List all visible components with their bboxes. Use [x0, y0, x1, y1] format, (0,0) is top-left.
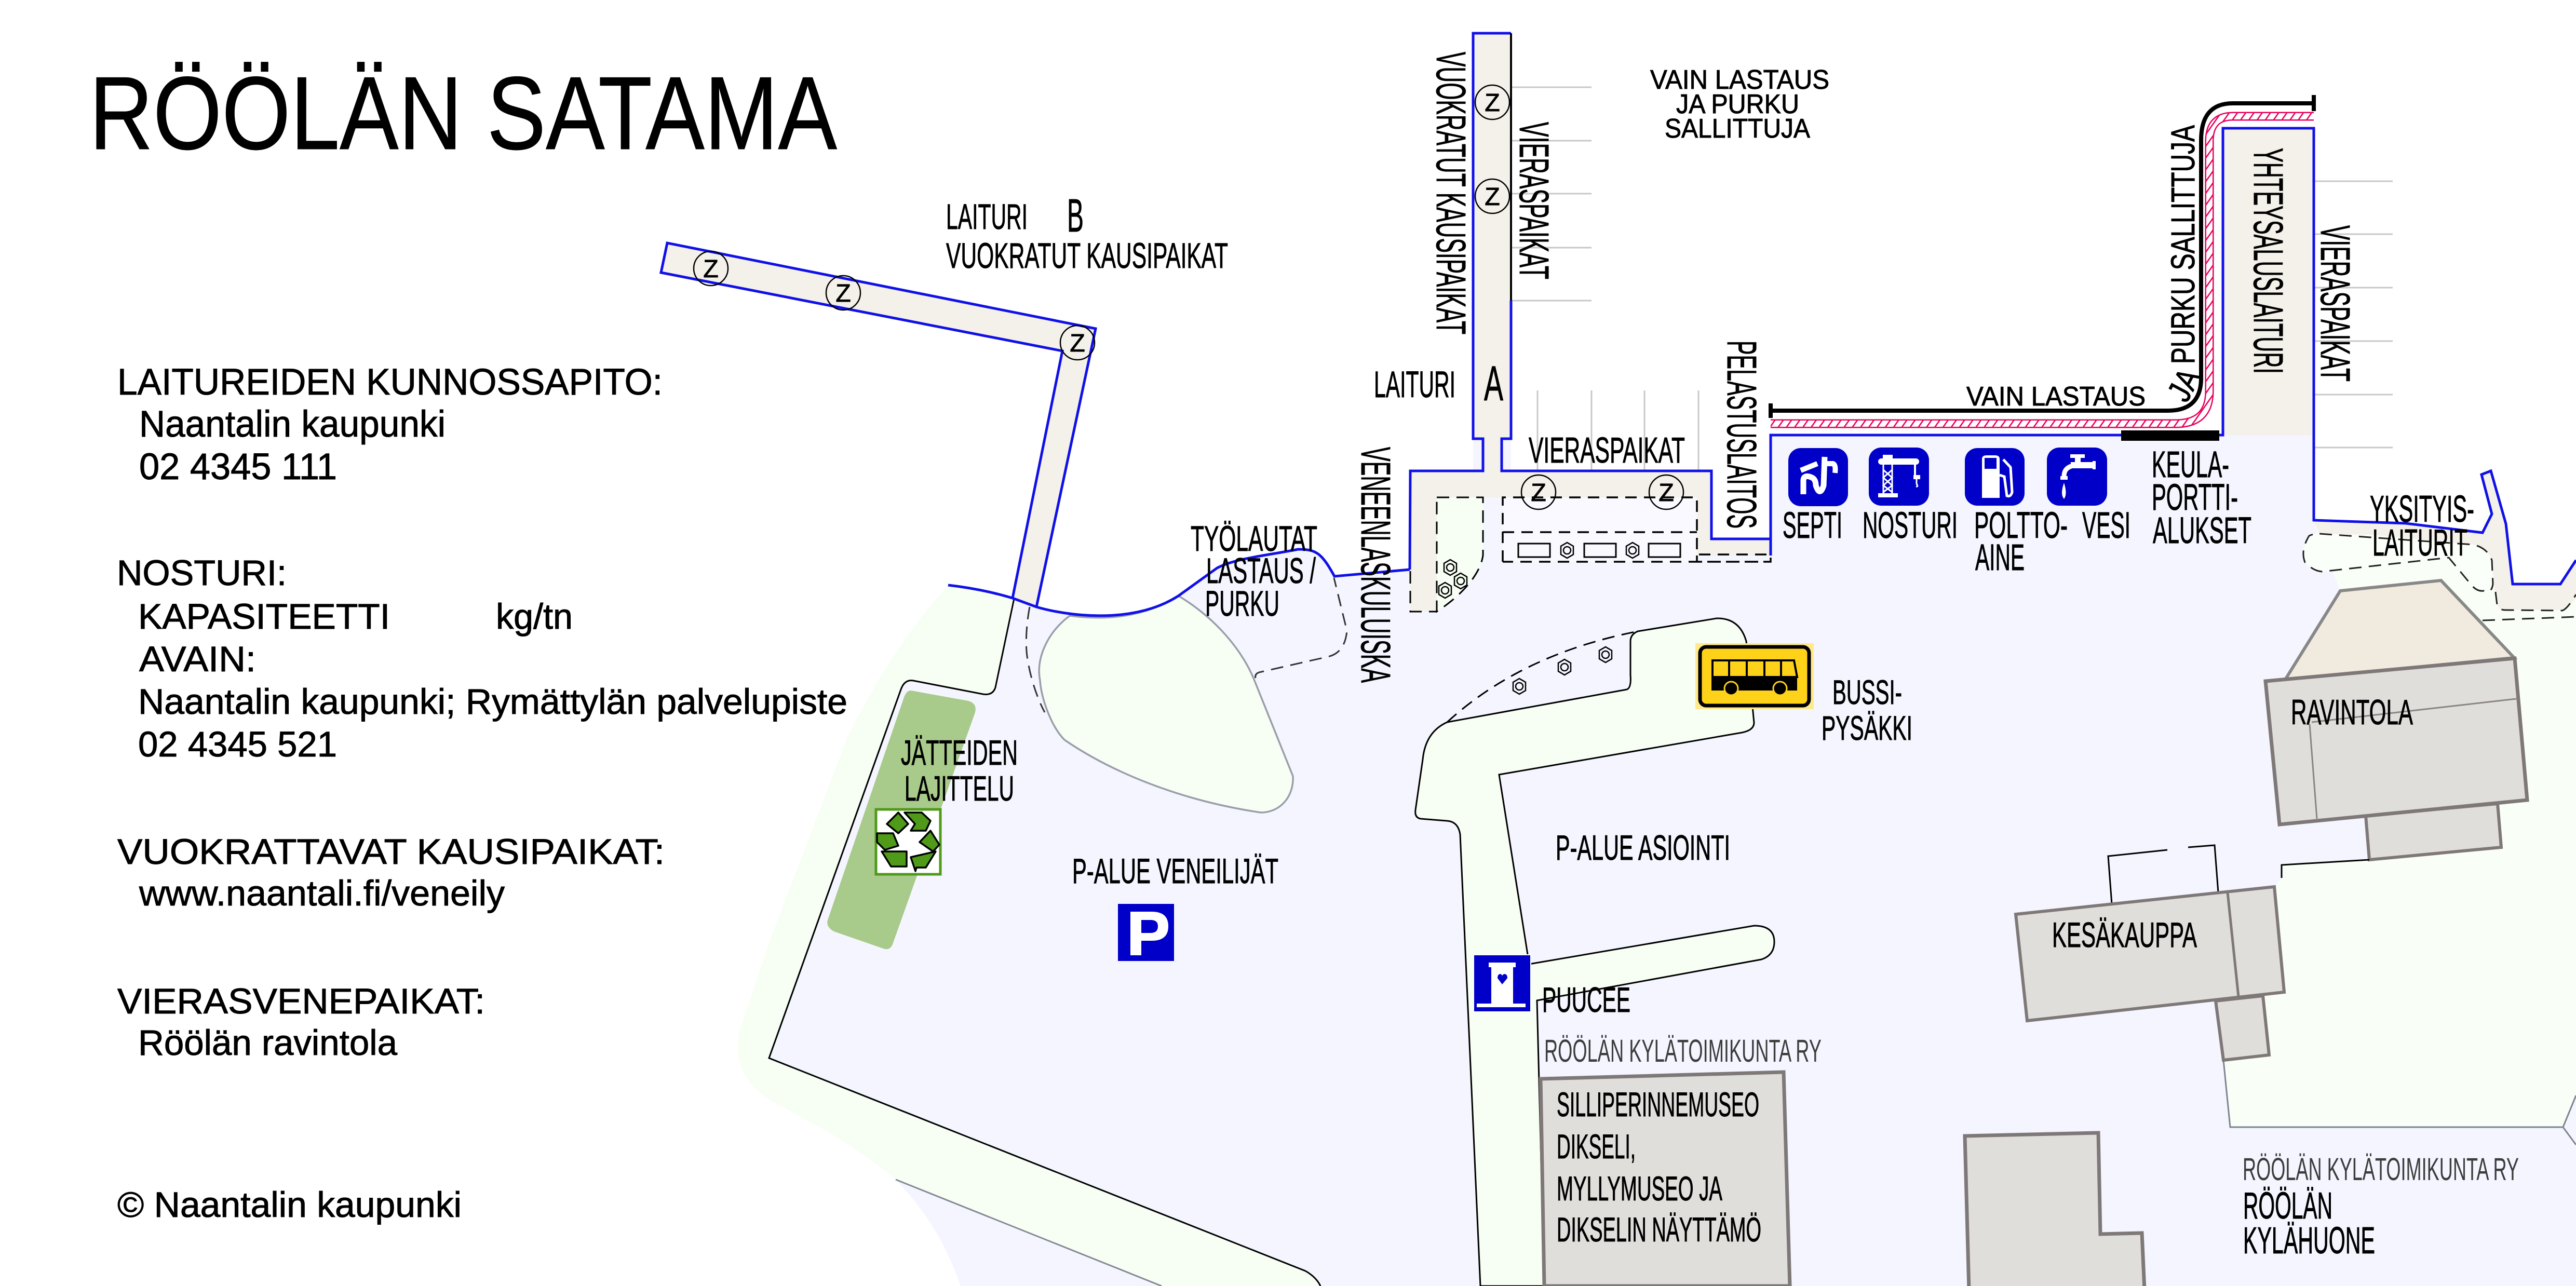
label: service icons [1783, 505, 2130, 578]
icon: bus stop sign [1695, 643, 1814, 709]
label: private piers [2370, 489, 2474, 564]
label: bow door ships: ALUKSET [2153, 510, 2251, 551]
label: unloading allowed vertical [2160, 125, 2208, 408]
label: private piers: YKSITYIS- [2370, 489, 2474, 530]
green area right [2223, 471, 2576, 1127]
label: pier B: B [1067, 190, 1084, 242]
label: unloading allowed vertical: PURKU SALLITTUJA [2164, 125, 2202, 364]
green island [1039, 596, 1293, 813]
label: bow door ships: KEULA- [2152, 444, 2229, 485]
info: crane: kg/tn [496, 597, 573, 637]
building: summer shop [2016, 887, 2284, 1021]
label: work platforms: PURKU [1205, 584, 1279, 624]
info: seasonal berths [117, 832, 665, 913]
pier B [661, 243, 1096, 607]
parking sign [1118, 904, 1174, 961]
mooring marker circles: Z [703, 255, 719, 283]
copyright: © Naantalin kaupunki [117, 1185, 462, 1225]
info: seasonal berths: VUOKRATTAVAT KAUSIPAIKAT: [117, 832, 665, 872]
shoreline left [948, 549, 1410, 616]
buildings: terrace [2285, 580, 2514, 680]
shore strip outline [769, 599, 1320, 1286]
label: loading and unloading: JA PURKU [1676, 89, 1799, 119]
label: bus stop [1822, 673, 1912, 747]
label: village hall [2243, 1152, 2519, 1262]
icon: fuel [1965, 448, 2025, 506]
label: museum: DIKSELI, [1557, 1127, 1636, 1166]
pink hatched no-mooring strip [1771, 116, 2314, 424]
icon: crane [1869, 448, 1929, 506]
label: unloading allowed vertical: JA [2160, 362, 2208, 408]
blue quay lines [1410, 33, 2576, 584]
building: restaurant annex [2366, 804, 2501, 860]
black loading line [1771, 95, 2314, 418]
info: crane: AVAIN: [139, 639, 256, 679]
label: museum [1557, 1085, 1761, 1249]
label: museum: SILLIPERINNEMUSEO [1557, 1085, 1759, 1123]
info: seasonal berths: www.naantali.fi/veneily [139, 873, 505, 913]
label: boat ramp: VENEENLASKULUISKA [1353, 447, 1399, 683]
label: village hall: RÖÖLÄN [2243, 1185, 2332, 1227]
label: guest berths horizontal: VIERASPAIKAT [1529, 430, 1685, 470]
label: work platforms: TYÖLAUTAT [1191, 519, 1317, 559]
private piers [2313, 471, 2576, 610]
label: service icons: AINE [1975, 537, 2025, 578]
info: pier maintenance: 02 4345 111 [139, 446, 337, 488]
label: work platforms [1191, 519, 1317, 624]
building: summer shop annex [2216, 996, 2269, 1060]
label: rented seasonal berths vertical: VUOKRATUT KAUSIPAIKAT [1428, 52, 1474, 334]
right plot boundary [2223, 1060, 2576, 1145]
green road and bus stop peninsula [1415, 618, 1774, 1286]
boat ramp [1410, 497, 1483, 612]
label: loading and unloading: VAIN LASTAUS [1650, 65, 1829, 95]
label: private piers: LAITURIT [2372, 522, 2467, 564]
label: service icons: VESI [2082, 505, 2130, 546]
info: crane: KAPASITEETTI [138, 597, 390, 637]
label: pier B: LAITURI [946, 197, 1028, 237]
green shore strip [738, 585, 1320, 1286]
label: museum: DIKSELIN NÄYTTÄMÖ [1557, 1210, 1761, 1249]
label: pier A: LAITURI [1374, 364, 1455, 405]
label: rescue service: PELASTUSLAITOS [1719, 341, 1765, 529]
building: museum [1541, 1072, 1790, 1286]
label: service icons: POLTTO- [1974, 505, 2068, 546]
lower road edge [896, 1180, 1162, 1286]
label: bus stop: BUSSI- [1832, 673, 1902, 711]
mooring marker circles: Z [835, 280, 851, 307]
label: service icons: SEPTI [1783, 505, 1842, 546]
mooring marker circles: Z [1070, 330, 1085, 357]
label: pier A [1374, 356, 1503, 411]
label: bow door ships [2152, 444, 2251, 551]
connecting pier [2223, 128, 2314, 435]
info: crane: Naantalin kaupunki; Rymättylän palvelupiste [138, 682, 847, 722]
road dashed edges [1026, 578, 1347, 712]
label: village hall: KYLÄHUONE [2243, 1220, 2375, 1262]
label: guest berths pier A: VIERASPAIKAT [1511, 122, 1557, 279]
fence outline [2108, 845, 2369, 904]
label: pier A: A [1484, 356, 1503, 411]
label: pier B: VUOKRATUT KAUSIPAIKAT [946, 236, 1228, 276]
label: museum: MYLLYMUSEO JA [1557, 1169, 1722, 1208]
mooring marker circles: Z [1531, 479, 1546, 507]
info: pier maintenance: LAITUREIDEN KUNNOSSAPITO: [117, 362, 663, 403]
info: crane [117, 553, 847, 764]
work platform [1503, 497, 1771, 562]
land base [739, 33, 2576, 1286]
label: connecting pier: YHTEYSALUSLAITURI [2245, 148, 2291, 374]
label: loading and unloading [1650, 65, 1829, 144]
icon: outhouse sign [1474, 955, 1531, 1012]
pier A [1410, 33, 1771, 612]
info: crane: 02 4345 521 [138, 724, 337, 764]
mooring marker circles: Z [1485, 183, 1500, 211]
mooring marker circles: Z [1485, 89, 1500, 117]
dashed edge of private pier [2483, 592, 2576, 620]
building: village hall [1965, 1133, 2145, 1286]
label: waste sorting [901, 733, 1018, 808]
info: crane: NOSTURI: [117, 553, 287, 593]
label: outhouse: PUUCEE [1542, 980, 1630, 1020]
info: pier maintenance: Naantalin kaupunki [139, 404, 446, 445]
black quay line [1510, 33, 1512, 301]
label: pier B [946, 190, 1228, 276]
private pier dashed area [2303, 534, 2493, 592]
label: bus stop: PYSÄKKI [1822, 709, 1912, 747]
label: boaters parking: P-ALUE VENEILIJÄT [1072, 851, 1278, 891]
green recycling area [827, 691, 976, 949]
label: summer shop: KESÄKAUPPA [2052, 915, 2197, 955]
label: village committee museum: RÖÖLÄN KYLÄTOIMIKUNTA RY [1544, 1033, 1822, 1068]
info: guest berths [117, 981, 485, 1063]
info: guest berths: VIERASVENEPAIKAT: [117, 981, 485, 1021]
waste zone icons: recycling sign [876, 809, 940, 874]
mooring marker circles: Z [1658, 479, 1674, 507]
label: guest berths right: VIERASPAIKAT [2312, 225, 2358, 382]
info: guest berths: Röölän ravintola [138, 1023, 398, 1063]
label: loading and unloading: SALLITTUJA [1665, 114, 1810, 144]
mooring lines [1511, 87, 2393, 470]
label: service icons: NOSTURI [1863, 505, 1958, 546]
building: restaurant [2265, 658, 2527, 824]
mooring marker circles [694, 85, 1683, 509]
peninsula dashed edge and trees [1447, 631, 1638, 722]
label: loading only: VAIN LASTAUS [1966, 382, 2146, 412]
label: restaurant: RAVINTOLA [2291, 693, 2413, 732]
icon: water [2047, 448, 2107, 506]
bow door berth [2121, 430, 2219, 441]
label: waste sorting: JÄTTEIDEN [901, 733, 1018, 773]
info: pier maintenance [117, 362, 663, 488]
icon: septic [1788, 448, 1848, 506]
title: RÖÖLÄN SATAMA [89, 56, 838, 171]
label: work platforms: LASTAUS / [1206, 551, 1316, 591]
label: customer parking: P-ALUE ASIOINTI [1556, 828, 1730, 868]
label: bow door ships: PORTTI- [2152, 477, 2238, 518]
label: waste sorting: LAJITTELU [905, 769, 1014, 808]
